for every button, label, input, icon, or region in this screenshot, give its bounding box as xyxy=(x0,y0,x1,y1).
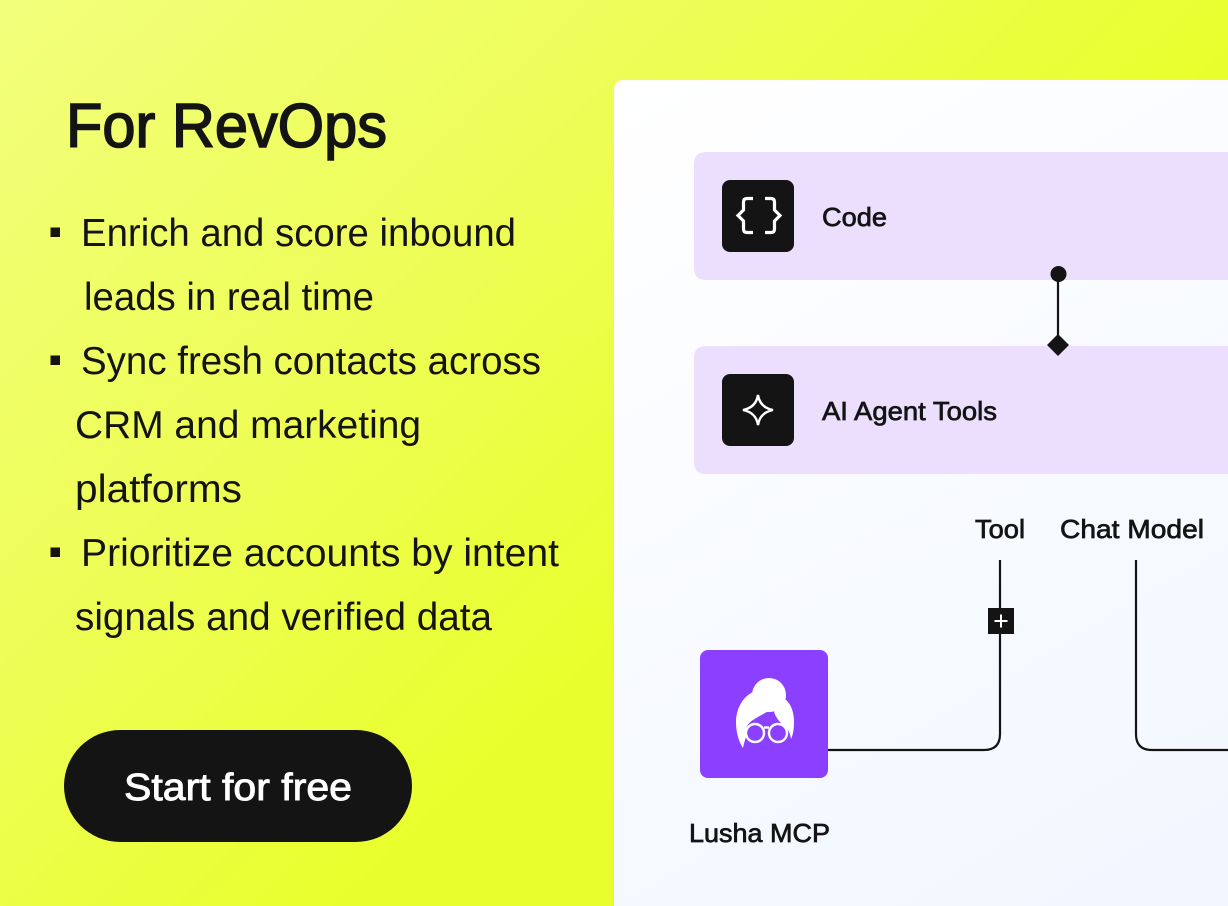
icon: sparkle xyxy=(722,374,794,446)
bullet 2 text: CRM and marketing xyxy=(75,404,421,447)
icon: plus box xyxy=(988,608,1014,634)
label: Tool: Tool xyxy=(975,514,1025,544)
label: Lusha MCP: Lusha MCP xyxy=(689,818,830,848)
bullet 2 text: platforms xyxy=(75,468,242,511)
button: Start for free xyxy=(64,730,412,842)
button: Start for free: Start for free xyxy=(124,767,352,809)
icon: curly braces xyxy=(722,180,794,252)
bullet 3 text: signals and verified data xyxy=(75,596,492,639)
label: Chat Model: Chat Model xyxy=(1060,514,1204,544)
label: Code: Code xyxy=(822,202,887,232)
label: AI Agent Tools: AI Agent Tools xyxy=(822,396,997,426)
bullet 3 text: Prioritize accounts by intent xyxy=(81,532,559,575)
node: AI Agent Tools xyxy=(694,346,1228,474)
bullet 3 marker xyxy=(50,548,60,557)
heading: For RevOps: For RevOps xyxy=(66,92,387,161)
connector: Lusha MCP to Tool xyxy=(828,560,1000,750)
bullet 2 text: Sync fresh contacts across xyxy=(81,340,541,383)
bullet 1 text xyxy=(81,212,516,319)
bullet list xyxy=(50,212,559,639)
bullet 1 text: Enrich and score inbound xyxy=(81,212,516,255)
connector: Code to AI Agent Tools xyxy=(1047,266,1069,356)
bullet 2 marker xyxy=(50,356,60,365)
panel: workflow diagram xyxy=(614,80,1228,906)
icon: Lusha logo xyxy=(700,650,828,778)
bullet 1 text: leads in real time xyxy=(84,276,374,319)
bullet 3 text xyxy=(75,532,559,639)
node: Code xyxy=(694,152,1228,280)
connector: Chat Model xyxy=(1136,560,1228,750)
bullet 1 marker xyxy=(50,228,60,237)
bullet 2 text xyxy=(75,340,541,511)
